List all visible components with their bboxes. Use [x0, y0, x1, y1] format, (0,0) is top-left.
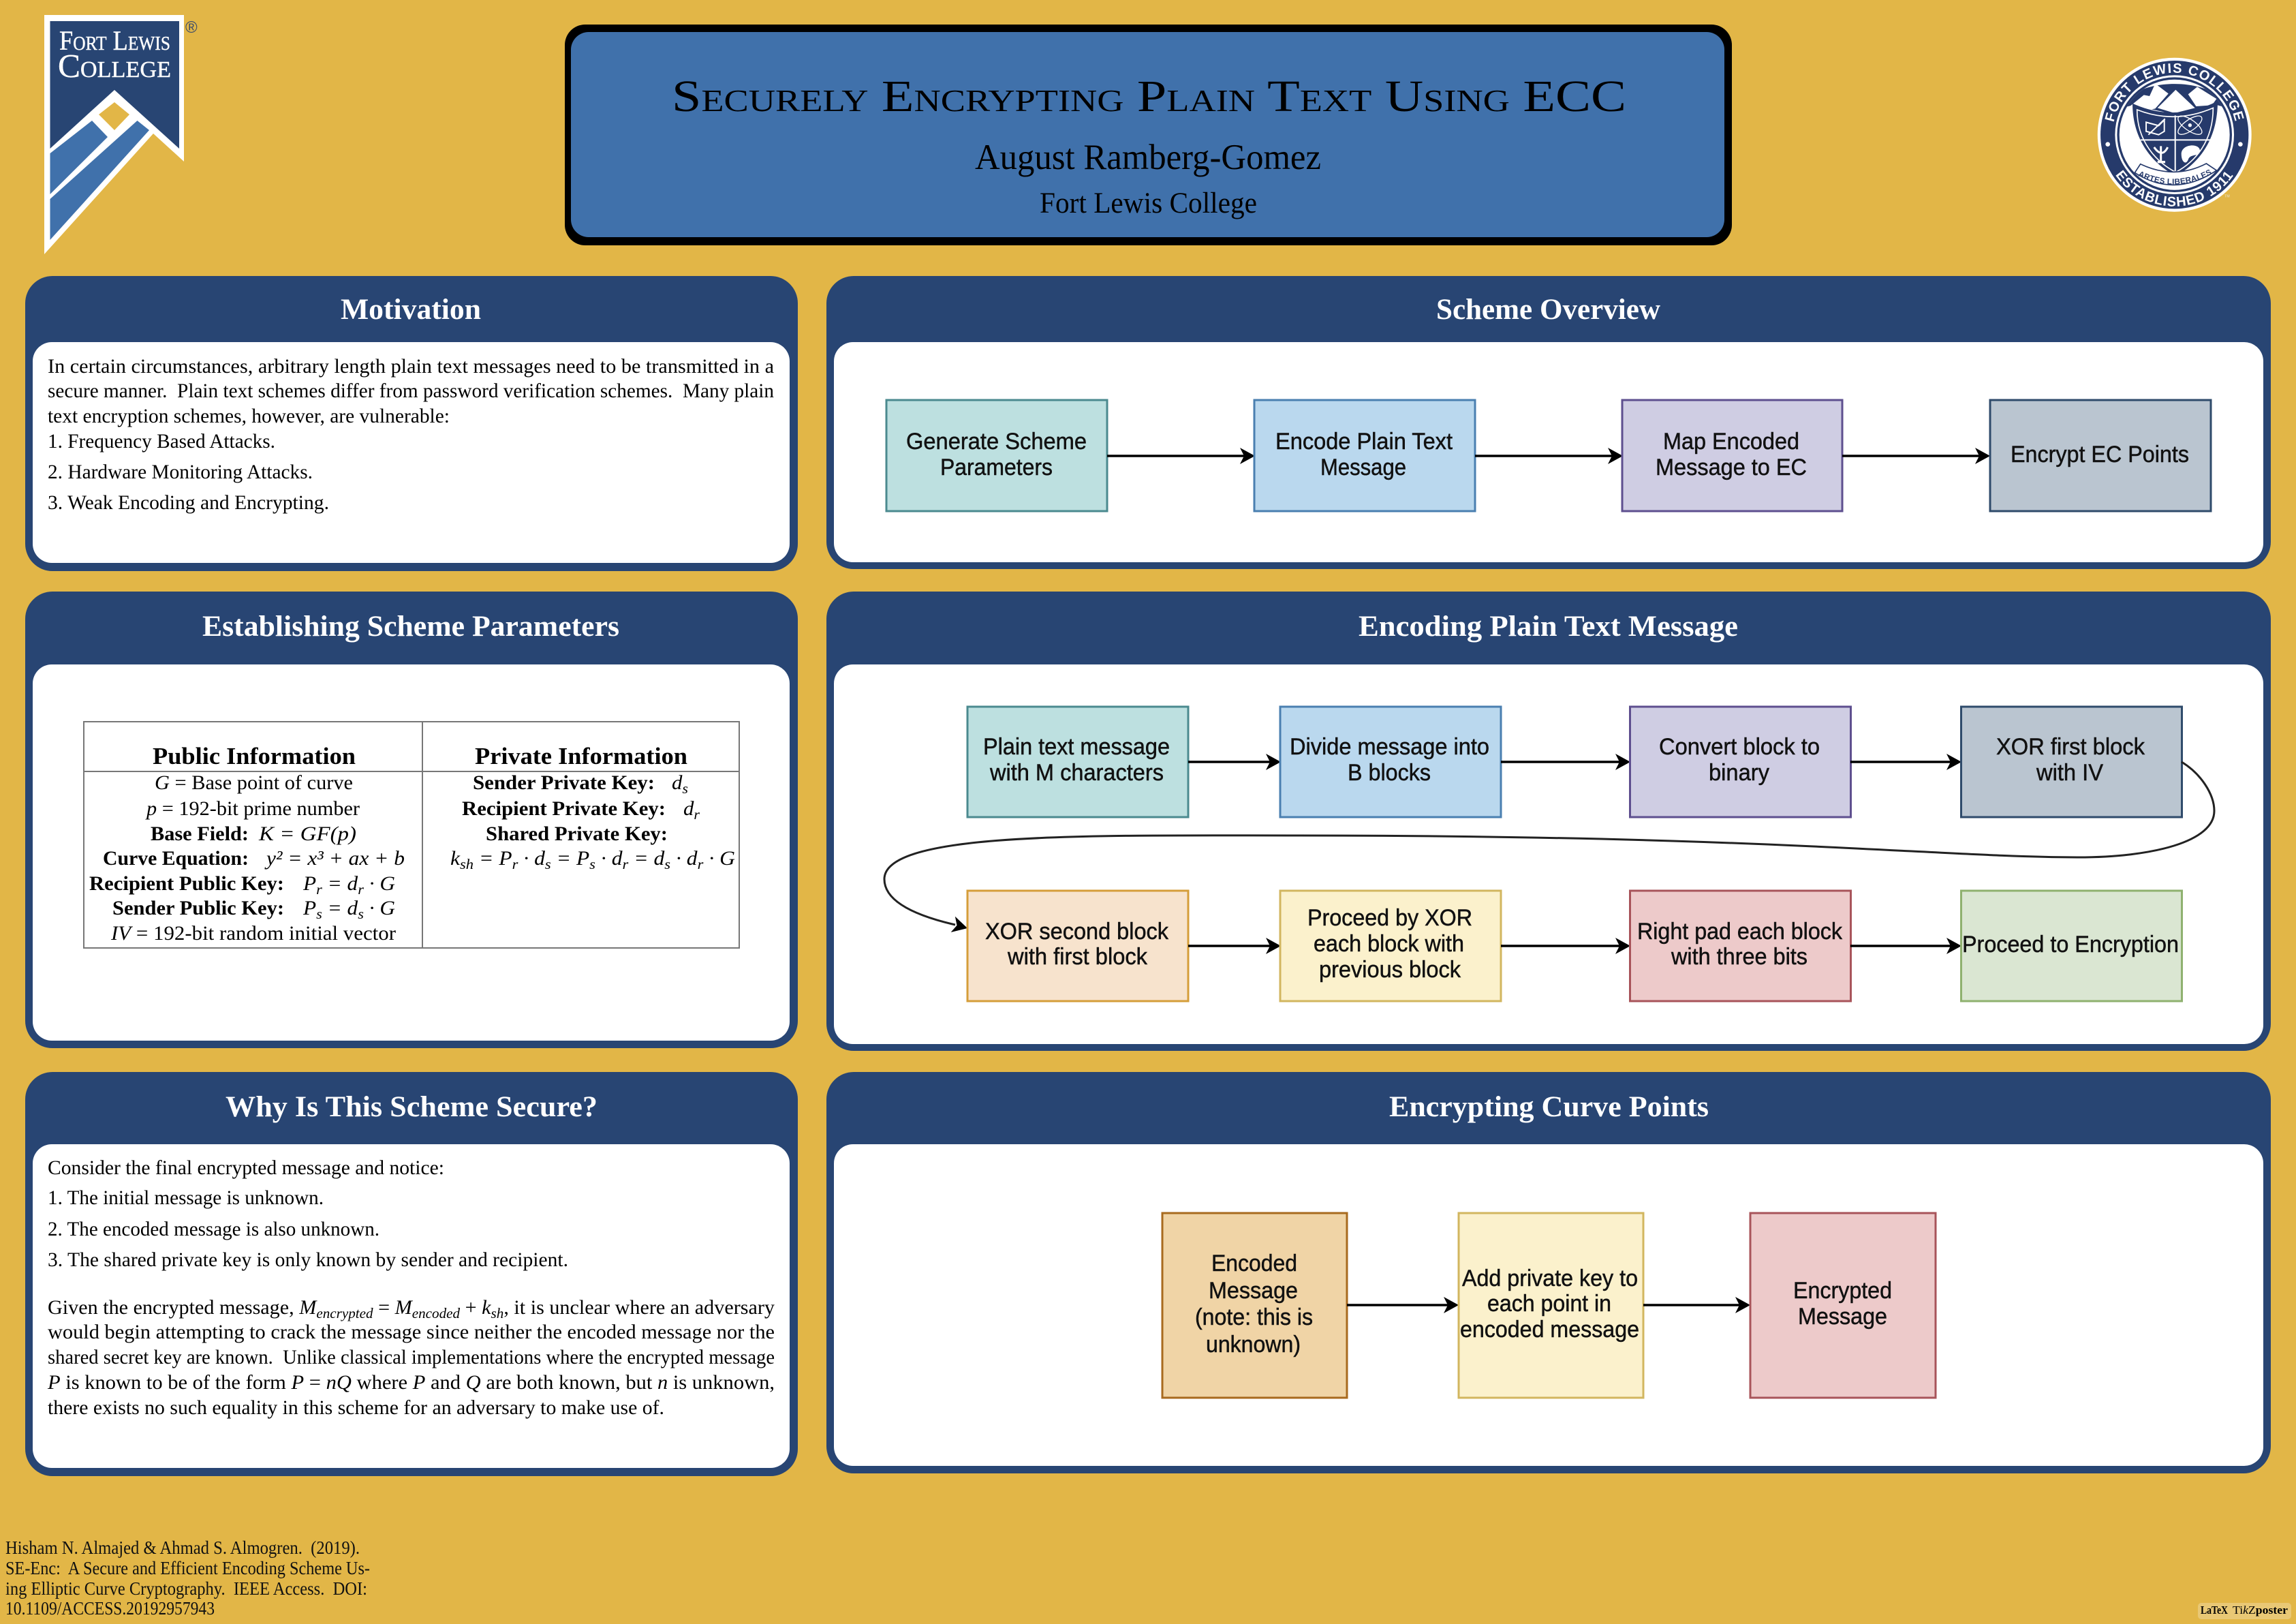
column: private information: s — [545, 856, 551, 872]
column: private information: · d — [670, 848, 698, 870]
table: public and private information — [84, 722, 739, 948]
box: XOR second block — [967, 891, 1188, 1001]
column: public information — [89, 743, 405, 945]
box: XOR first block: with IV — [2036, 760, 2103, 786]
text block: motivation body: 3. Weak Encoding and Encrypting. — [48, 491, 329, 514]
box: Generate Scheme Parameters: Parameters — [940, 455, 1053, 480]
column: private information: r — [694, 806, 700, 823]
box: Encode Plain Text Message — [1254, 400, 1475, 511]
arrow: curved connector between rows — [884, 762, 2214, 936]
column: private information: sh — [460, 856, 474, 872]
box: Proceed by XOR — [1280, 891, 1501, 1001]
text block: security argument: there exists no such equality in this scheme for an adversary to make use of. — [48, 1396, 664, 1419]
box: Encrypt EC Points: Encrypt EC Points — [2011, 442, 2189, 468]
box: Divide message: Divide message into — [1290, 734, 1489, 760]
text block: security argument: shared secret key are known. Unlike classical implementations where the encrypted message — [48, 1346, 775, 1368]
box: Plain text message: with M characters — [989, 760, 1164, 786]
box: Encrypted Message — [1750, 1213, 1936, 1398]
text block: security argument: sh — [491, 1305, 503, 1321]
text block: security argument: , it is unclear where an adversary — [503, 1296, 775, 1319]
column: private information: = P — [551, 848, 589, 870]
text block: numbered notices: 3. The shared private key is only known by sender and recipient. — [48, 1248, 568, 1271]
column: public information: r — [316, 881, 323, 898]
box: Generate Scheme Parameters — [886, 400, 1107, 511]
arrow — [1501, 754, 1630, 770]
seal: Fort Lewis College crest: ESTABLISHED 1911 — [2116, 170, 2233, 206]
column: private information: s — [589, 856, 595, 872]
box: Divide message — [1280, 707, 1501, 817]
column: private information: · G — [703, 848, 735, 870]
box: Encoded Message: (note: this is — [1195, 1304, 1313, 1330]
panel: Encrypting Curve Points — [826, 1072, 2271, 1473]
logo: Fort Lewis College banner — [44, 15, 198, 254]
text block: motivation body — [48, 355, 774, 514]
box: Encrypted Message: Encrypted — [1793, 1278, 1892, 1304]
text block: motivation body: 2. Hardware Monitoring Attacks. — [48, 461, 313, 483]
badge: LaTeX TikZposter: LaTeX — [2201, 1604, 2229, 1617]
citation — [5, 1537, 370, 1619]
heading: Motivation: Motivation — [341, 294, 481, 326]
box: Map Encoded Message to EC: Message to EC — [1656, 455, 1807, 480]
arrow — [1850, 754, 1961, 770]
column: public information: = d — [322, 898, 358, 919]
panel: Establishing Scheme Parameters — [25, 592, 798, 1048]
box: Encrypt EC Points — [1990, 400, 2211, 511]
column: public information: Curve Equation: — [103, 848, 249, 870]
text block: security argument: k — [482, 1296, 491, 1319]
badge: LaTeX TikZposter — [2198, 1603, 2291, 1619]
box: Encoded Message — [1162, 1213, 1347, 1398]
box: Proceed by XOR: previous block — [1319, 957, 1461, 983]
panel: Motivation — [25, 276, 798, 571]
column: private information: = d — [628, 848, 665, 870]
box: Right pad each block: Right pad each block — [1637, 919, 1843, 945]
box: Convert block to binary: Convert block to — [1659, 734, 1820, 760]
column: private information: Shared Private Key: — [486, 823, 668, 845]
text block: motivation body: text encryption schemes, however, are vulnerable: — [48, 405, 450, 427]
box: Proceed to Encryption: Proceed to Encryption — [1962, 932, 2179, 957]
column: public information: G = Base point of curve — [155, 772, 353, 794]
box: Plain text message — [967, 707, 1188, 817]
column: public information: Sender Public Key: — [112, 898, 284, 919]
column: private information — [450, 743, 735, 872]
column: private information: r — [623, 856, 629, 872]
panel: Encoding Plain Text Message — [826, 592, 2271, 1051]
column: public information: r — [358, 881, 364, 898]
text block: motivation body: In certain circumstances, arbitrary length plain text messages need to be transmitted in a — [48, 355, 774, 378]
text block: security argument: M — [394, 1296, 414, 1319]
text block: motivation body: secure manner. Plain text schemes differ from password verification schemes. Many plain — [48, 380, 774, 402]
seal: Fort Lewis College crest: ARTES LIBERALES — [2138, 170, 2212, 184]
column: private information: r — [512, 856, 518, 872]
arrow — [1850, 938, 1961, 954]
text block: security argument: = — [373, 1296, 395, 1319]
box: Right pad each block — [1630, 891, 1850, 1001]
column: public information: · G — [364, 898, 395, 919]
text block: security argument: encrypted — [316, 1305, 373, 1321]
box: Proceed to Encryption — [1961, 891, 2182, 1001]
column: public information: Base Field: — [151, 823, 249, 845]
text block: numbered notices: Consider the final encrypted message and notice: — [48, 1156, 444, 1179]
column: public information: IV = 192-bit random initial vector — [110, 923, 396, 945]
citation: SE-Enc: A Secure and Efficient Encoding Scheme Us- — [5, 1558, 370, 1578]
column: private information: · d — [518, 848, 545, 870]
column: public information: s — [358, 906, 364, 922]
seal: Fort Lewis College crest: FORT LEWIS COLLEGE — [2105, 63, 2244, 121]
box: Plain text message: Plain text message — [983, 734, 1170, 760]
text block: motivation body: 1. Frequency Based Attacks. — [48, 430, 275, 453]
box: Convert block to binary — [1630, 707, 1850, 817]
box: XOR second block: with first block — [1007, 944, 1148, 970]
column: private information: k — [450, 848, 459, 870]
text block: security argument — [47, 1296, 775, 1419]
heading: Encoding Plain Text Message: Encoding Plain Text Message — [1359, 611, 1738, 643]
column: private information: Recipient Private Key: — [462, 798, 666, 820]
box: Proceed by XOR: each block with — [1314, 931, 1464, 957]
box: Add private key: Add private key to — [1462, 1266, 1638, 1291]
text block: security argument: Given the encrypted message, M — [48, 1296, 316, 1319]
column: public information: p = 192-bit prime number — [145, 798, 360, 820]
text block: security argument: + — [460, 1296, 482, 1319]
heading: Encrypting Curve Points: Encrypting Curve Points — [1389, 1091, 1709, 1123]
column: public information: s — [316, 906, 322, 922]
column: public information: Public Information — [153, 743, 356, 769]
text block: numbered notices: 2. The encoded message is also unknown. — [48, 1218, 379, 1240]
column: private information: s — [682, 780, 688, 797]
arrow — [1475, 448, 1623, 464]
box: Encoded Message: Encoded — [1211, 1251, 1297, 1276]
box: Proceed by XOR: Proceed by XOR — [1307, 905, 1472, 931]
arrow — [1188, 754, 1281, 770]
title banner — [565, 25, 1732, 245]
logo: Fort Lewis College banner: Fort Lewis — [59, 25, 170, 56]
text block: numbered notices — [48, 1156, 568, 1271]
box: Add private key — [1459, 1213, 1643, 1398]
text block: numbered notices: 1. The initial message is unknown. — [48, 1186, 324, 1209]
poster title: Securely Encrypting Plain Text Using ECC — [672, 72, 1626, 121]
column: private information: d — [683, 798, 694, 820]
author: August Ramberg-Gomez — [975, 138, 1321, 177]
arrow — [1188, 938, 1281, 954]
column: public information: P — [303, 898, 315, 919]
box: Map Encoded Message to EC: Map Encoded — [1663, 429, 1799, 455]
arrow — [1842, 448, 1990, 464]
arrow — [1643, 1297, 1750, 1313]
arrow — [1107, 448, 1255, 464]
arrow — [1347, 1297, 1459, 1313]
box: Map Encoded Message to EC — [1622, 400, 1842, 511]
column: private information: · d — [595, 848, 623, 870]
box: Encrypted Message: Message — [1798, 1304, 1887, 1330]
heading: Scheme Overview: Scheme Overview — [1436, 294, 1660, 326]
column: private information: s — [664, 856, 670, 872]
box: Convert block to binary: binary — [1709, 760, 1769, 786]
box: XOR first block — [1961, 707, 2182, 817]
column: private information: d — [672, 772, 682, 794]
seal: Fort Lewis College crest — [2097, 57, 2252, 212]
panel: Scheme Overview — [826, 276, 2271, 569]
column: public information: y² = x³ + ax + b — [264, 848, 405, 870]
box: Right pad each block: with three bits — [1671, 944, 1808, 970]
box: Encoded Message: unknown) — [1206, 1332, 1301, 1358]
arrow — [1501, 938, 1630, 954]
box: Encode Plain Text Message: Encode Plain Text — [1275, 429, 1453, 455]
box: XOR second block: XOR second block — [985, 919, 1169, 945]
column: public information: Recipient Public Key: — [89, 873, 284, 895]
box: Generate Scheme Parameters: Generate Scheme — [906, 429, 1087, 455]
box: Encoded Message: Message — [1209, 1278, 1298, 1304]
citation: Hisham N. Almajed & Ahmad S. Almogren. (2019). — [5, 1537, 360, 1558]
column: private information: r — [698, 856, 704, 872]
box: XOR first block: XOR first block — [1996, 734, 2145, 760]
citation: 10.1109/ACCESS.20192957943 — [5, 1598, 215, 1619]
panel: Why Is This Scheme Secure? — [25, 1072, 798, 1476]
column: private information: Sender Private Key: — [473, 772, 655, 794]
logo: Fort Lewis College banner: ® — [185, 18, 198, 37]
text block: security argument: P is known to be of the form P = nQ where P and Q are both known, but n is unknown, — [47, 1371, 775, 1394]
seal: Fort Lewis College crest: TM — [2224, 194, 2230, 198]
column: public information: P — [303, 873, 315, 895]
box: Encode Plain Text Message: Message — [1320, 455, 1406, 480]
column: private information: Private Information — [475, 743, 687, 769]
column: private information: = P — [474, 848, 512, 870]
text block: security argument: encoded — [412, 1305, 461, 1321]
box: Add private key: encoded message — [1460, 1317, 1639, 1343]
institution: Fort Lewis College — [1040, 187, 1257, 219]
box: Add private key: each point in — [1487, 1291, 1611, 1317]
badge: LaTeX TikZposter: TikZposter — [2233, 1604, 2288, 1617]
heading: Why Is This Scheme Secure?: Why Is This Scheme Secure? — [226, 1091, 598, 1123]
heading: Establishing Scheme Parameters: Establishing Scheme Parameters — [202, 611, 619, 643]
column: public information: · G — [364, 873, 395, 895]
column: public information: K = GF(p) — [258, 823, 356, 845]
box: Divide message: B blocks — [1348, 760, 1431, 786]
citation: ing Elliptic Curve Cryptography. IEEE Access. DOI: — [5, 1578, 367, 1599]
logo: Fort Lewis College banner: College — [58, 47, 171, 85]
text block: security argument: would begin attempting to crack the message since neither the encoded message nor the — [48, 1321, 775, 1343]
column: public information: = d — [322, 873, 358, 895]
